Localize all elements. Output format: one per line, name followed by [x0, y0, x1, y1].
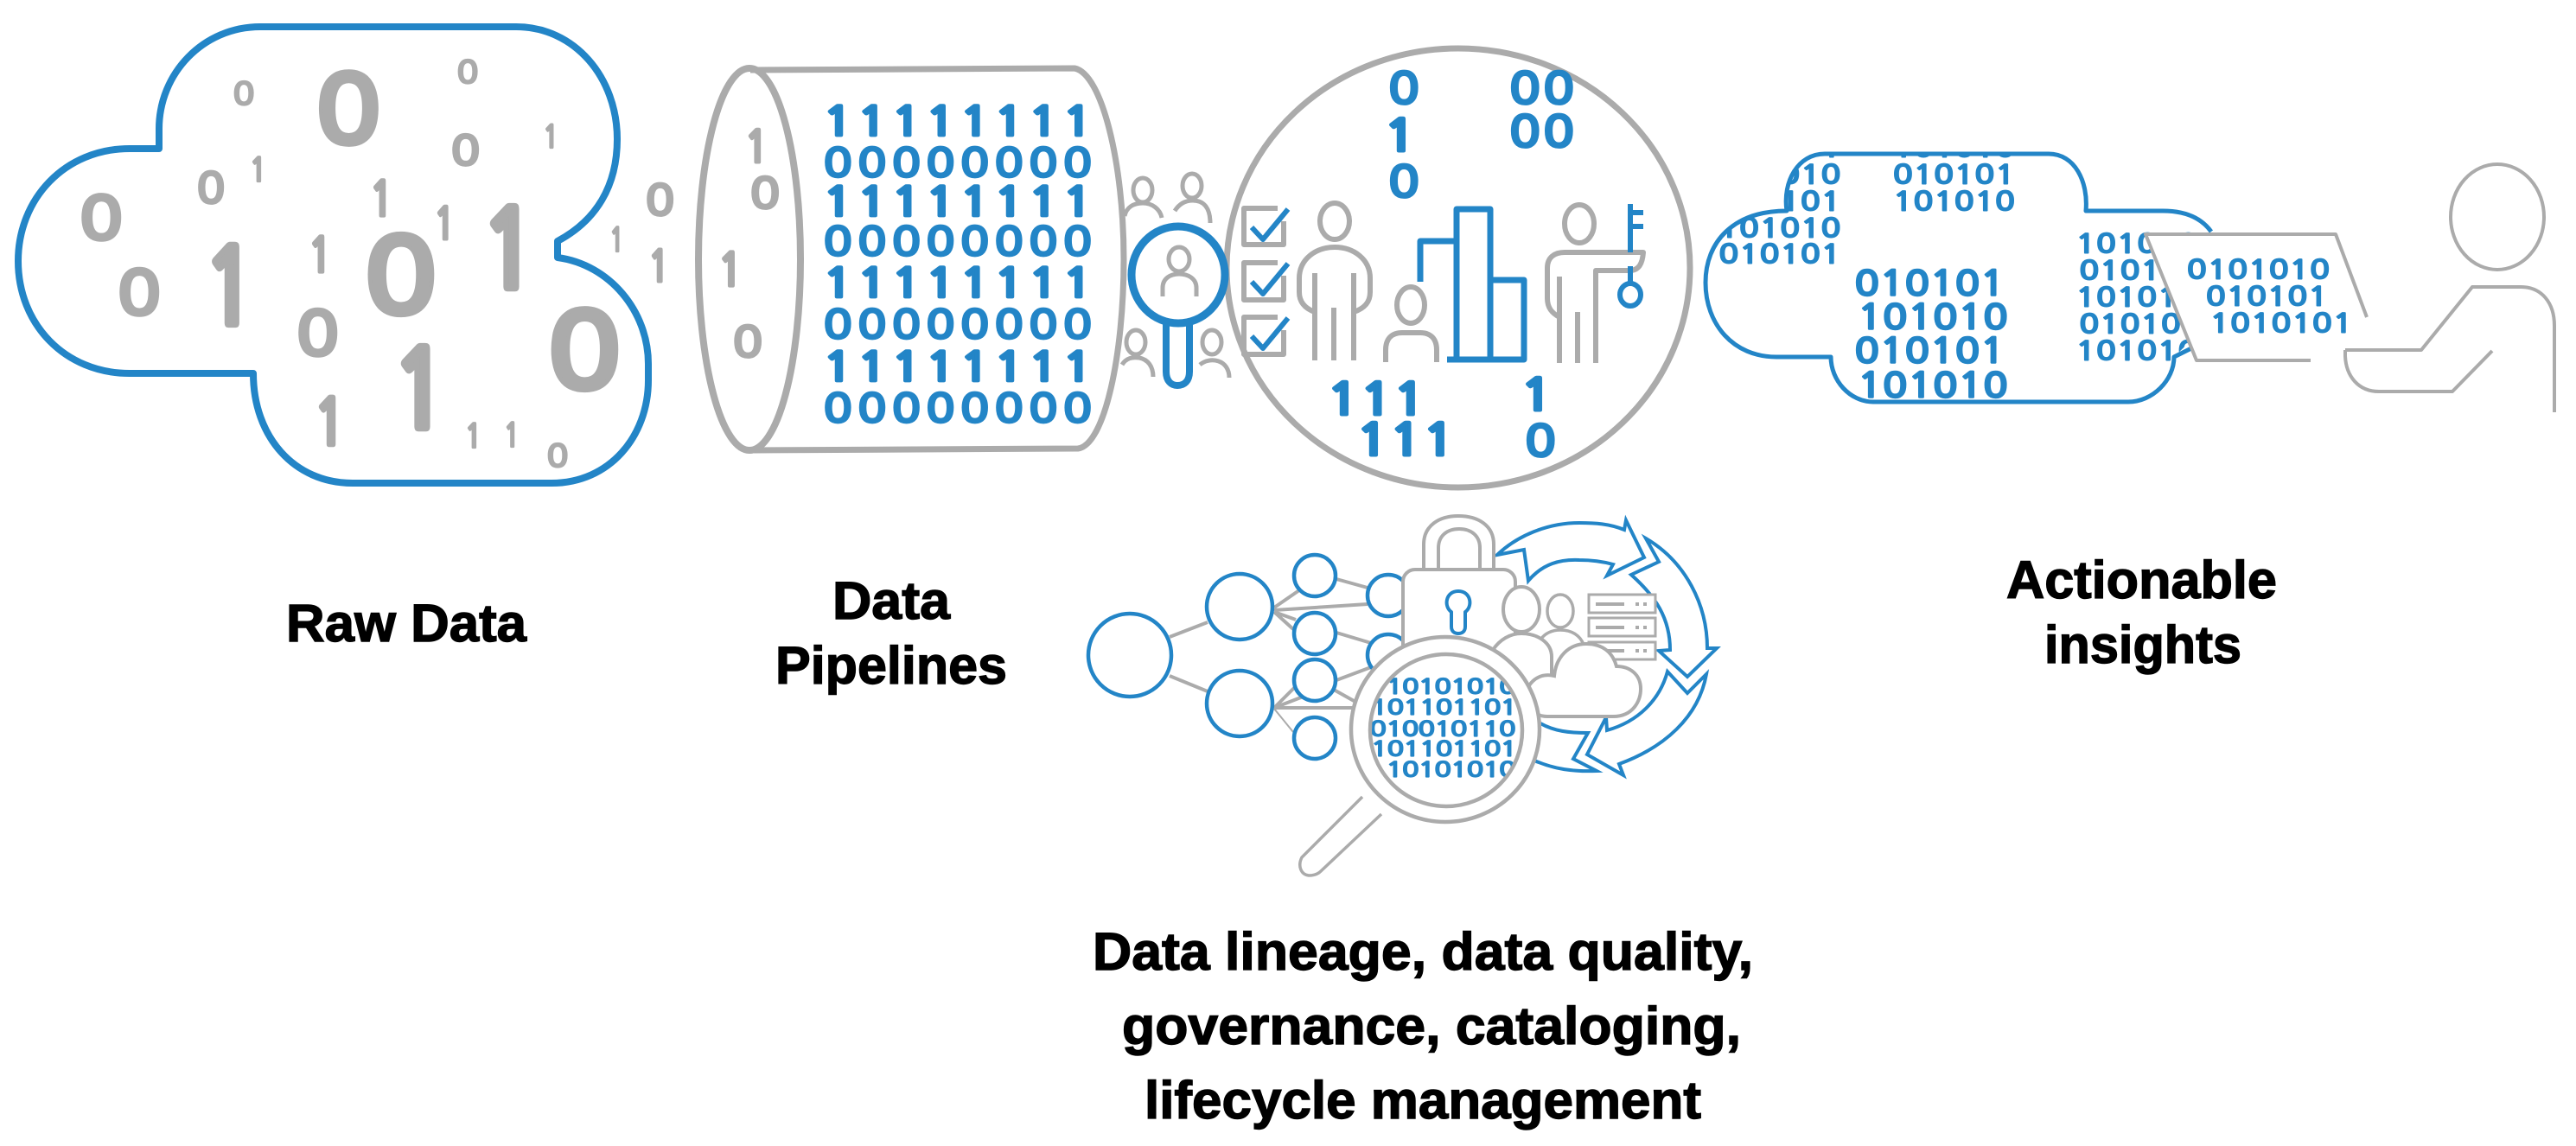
scattered grey zeros: 0: [117, 263, 162, 325]
scattered grey zeros: 0: [196, 168, 226, 211]
heading: governance: governance, cataloging,: [1122, 996, 1741, 1056]
bar chart: [1420, 209, 1524, 360]
icon: rear person: [1540, 595, 1584, 683]
grey digits on cylinder end: 1: [744, 125, 768, 169]
cloud binary rows: 010101: [2079, 312, 2202, 338]
binary rows: 00000000: [823, 305, 1093, 345]
heading: data pipelines: Pipelines: [775, 636, 1007, 696]
scattered grey zeros: 0: [450, 131, 481, 173]
cloud binary rows: 010101: [1718, 242, 1841, 268]
binary rows: 11111111: [823, 102, 1093, 142]
cloud binary rows: 101010: [1893, 136, 2015, 162]
icon: server stack: [1589, 595, 1655, 659]
lens binary rows: 101101101: [1371, 697, 1518, 718]
scattered grey ones: 1: [392, 337, 449, 444]
magnifier ring: [1132, 226, 1225, 323]
lens binary rows: 10101010: [1386, 677, 1516, 697]
scattered grey ones: 1: [504, 419, 520, 452]
scattered grey zeros: 0: [233, 80, 255, 111]
blue digits in circle: 111: [1356, 419, 1455, 462]
scattered grey ones: 1: [314, 392, 347, 455]
scattered grey zeros: 0: [363, 226, 438, 331]
scattered grey ones: [203, 123, 670, 455]
cycle arrow: lower right: [1587, 672, 1706, 775]
cloud binary rows: 101010: [1718, 216, 1841, 242]
cloud binary rows: 101010: [2075, 285, 2198, 311]
heading: data pipelines: [775, 571, 1007, 696]
blue digits in circle: 0: [1388, 68, 1420, 111]
blue digits in circle: 00: [1509, 68, 1575, 111]
icon: key: [1620, 204, 1643, 306]
grey digits on cylinder end: 0: [732, 322, 763, 365]
scattered grey zeros: 0: [645, 180, 675, 223]
heading: actionable insights: [2006, 551, 2277, 675]
panel: analysts circle: [1227, 48, 1690, 487]
scattered grey zeros: 0: [79, 190, 124, 250]
blue digits in circle: [1327, 68, 1575, 464]
blue digits in circle: 0: [1388, 162, 1420, 205]
laptop binary: 0101010: [2187, 258, 2330, 283]
laptop binary: [2187, 258, 2353, 337]
binary rows: 00000000: [823, 389, 1093, 429]
panel: magnifier with people: [1122, 174, 1229, 385]
heading: governance: lifecycle management: [1145, 1071, 1701, 1130]
blue digits in circle: 0: [1525, 421, 1557, 464]
cloud outline: [1706, 154, 2211, 402]
icon: top left person: [1125, 178, 1162, 218]
binary rows: 11111111: [823, 347, 1093, 387]
icon: cloud: [1527, 644, 1641, 716]
cloud binary rows: 101010: [1718, 162, 1841, 188]
scattered grey zeros: 0: [315, 64, 382, 159]
scattered grey ones: 1: [250, 154, 267, 187]
icon: user head: [2451, 164, 2544, 270]
blue digits in circle: 00: [1509, 111, 1575, 155]
scattered grey ones: 1: [369, 176, 393, 224]
lens binary rows: 010010110: [1369, 719, 1516, 740]
lens binary rows: 10101010: [1386, 760, 1516, 780]
icon: padlock: [1403, 516, 1515, 665]
scattered grey zeros: [79, 57, 675, 472]
cloud binary rows: 101010: [1857, 300, 2008, 334]
binary rows: 00000000: [823, 143, 1093, 183]
cloud binary rows: 010101: [1854, 334, 2005, 368]
heading: raw data: Raw Data: [286, 594, 527, 653]
grey digits on cylinder end: 1: [717, 247, 743, 293]
scattered grey ones: 1: [481, 197, 538, 304]
cylinder end ellipse: [698, 68, 800, 450]
scattered grey ones: 1: [609, 224, 624, 257]
lens outer ring: [1351, 637, 1540, 822]
cloud binary rows: 101010: [1857, 368, 2008, 403]
scattered grey ones: 1: [648, 246, 670, 289]
lens handle: [1300, 797, 1381, 875]
icon: presenter: [1547, 205, 1643, 363]
binary rows: 11111111: [823, 182, 1093, 222]
grey digits on cylinder end: [717, 125, 781, 365]
laptop binary: 010101: [2206, 284, 2328, 310]
cloud binary rows: 010101: [1893, 162, 2015, 188]
scattered grey zeros: 0: [296, 303, 340, 366]
lens binary rows: [1369, 677, 1518, 780]
scattered grey ones: 1: [203, 237, 257, 341]
heading: governance: Data lineage, data quality,: [1093, 922, 1753, 982]
network nodes: [1088, 555, 1409, 759]
heading: data pipelines: Data: [832, 571, 951, 631]
icon: seated person: [1386, 287, 1437, 362]
cloud binary rows: 101010: [2075, 232, 2198, 258]
blue digits in circle: 1: [1521, 374, 1553, 417]
icon: bottom left person: [1122, 330, 1153, 377]
scattered grey ones: 1: [543, 123, 558, 153]
cycle arrow: right: [1631, 538, 1717, 677]
laptop outline: [2146, 234, 2367, 360]
icon: checklist: [1244, 208, 1288, 354]
scattered grey zeros: 0: [546, 441, 569, 472]
scattered grey ones: 1: [465, 420, 482, 453]
scattered grey zeros: 0: [456, 57, 479, 88]
panel: governance illustration: [1088, 516, 1717, 875]
grey digits on cylinder end: 0: [749, 173, 781, 216]
cycle arrow: top: [1497, 520, 1644, 581]
cycle arrow: bottom: [1534, 723, 1597, 771]
cloud binary rows: 101010: [2075, 339, 2198, 365]
cloud outline: [18, 27, 648, 483]
panel: insights cloud: [1706, 136, 2211, 403]
panel: laptop and user: [2146, 164, 2554, 412]
magnifier handle: [1166, 323, 1189, 385]
cloud binary rows: [1718, 136, 2202, 403]
laptop screen: [2146, 234, 2369, 360]
binary rows: 11111111: [823, 264, 1093, 303]
scattered grey ones: 1: [434, 202, 456, 246]
laptop binary: 1010101: [2209, 311, 2353, 337]
lens binary rows: 101101101: [1371, 739, 1518, 760]
panel: data pipeline cylinder: [698, 68, 1124, 450]
blue digits in circle: 1: [1384, 115, 1416, 158]
large circle: [1227, 48, 1690, 487]
icon: user body: [2345, 287, 2554, 412]
icon: standing person: [1299, 203, 1370, 360]
icon: person in lens: [1163, 247, 1196, 296]
network lines: [1170, 579, 1371, 732]
heading: actionable insights: insights: [2044, 615, 2241, 675]
heading: governance: [1093, 922, 1753, 1130]
cloud binary rows: 010101: [2079, 258, 2202, 284]
heading: actionable insights: Actionable: [2006, 551, 2277, 610]
icon: bottom right person: [1200, 330, 1229, 378]
cloud binary rows: 101010: [1893, 189, 2015, 215]
icon: front person: [1493, 587, 1552, 691]
cylinder body: [750, 68, 1124, 450]
blue digits in circle: 111: [1327, 379, 1425, 422]
binary rows: [823, 102, 1093, 429]
panel: raw data cloud: [18, 27, 675, 483]
binary rows: 00000000: [823, 222, 1093, 262]
scattered grey zeros: 0: [546, 301, 622, 406]
cloud binary rows: 010101: [1854, 266, 2005, 301]
scattered grey ones: 1: [308, 232, 332, 280]
lens inner ring: [1370, 654, 1522, 806]
cloud binary rows: 010101: [1718, 189, 1841, 215]
icon: top right person: [1175, 174, 1210, 223]
cloud binary rows: 010101: [1718, 136, 1841, 162]
